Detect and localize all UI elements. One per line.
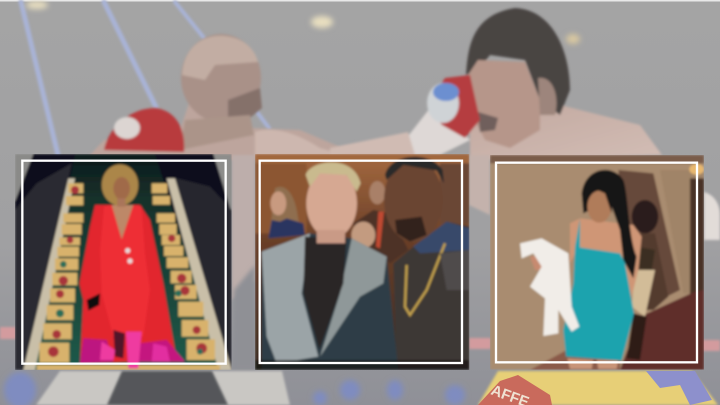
ceiling lights bbox=[26, 1, 580, 44]
dark shorts at bottom bbox=[107, 371, 228, 405]
man in background bbox=[353, 210, 408, 263]
white frame bbox=[496, 163, 697, 362]
white robe at bottom bbox=[36, 371, 290, 405]
panel: woman in red on the staircase bbox=[15, 154, 232, 370]
white frame bbox=[260, 161, 462, 363]
main woman's arms and chest bbox=[569, 218, 644, 298]
left boxer bbox=[90, 34, 415, 300]
left boxer shadow column bbox=[232, 265, 255, 370]
left man's suit bbox=[262, 233, 398, 370]
right man's shirt bbox=[393, 222, 469, 370]
woman: red cape and jumpsuit bbox=[79, 205, 177, 363]
dress bbox=[563, 247, 634, 361]
panel: woman in turquoise dress bbox=[490, 155, 704, 370]
left man's head bbox=[306, 168, 357, 238]
shorts blue emblem bbox=[646, 371, 712, 405]
right boxer glove edge bbox=[704, 192, 720, 240]
ring ropes bbox=[0, 327, 720, 351]
legs bbox=[567, 358, 593, 369]
crowd lights at the bottom bbox=[4, 372, 465, 405]
second woman behind bbox=[632, 200, 658, 233]
panel: two men selfie bbox=[255, 154, 469, 370]
right man's head bbox=[384, 158, 443, 242]
white jacket bbox=[520, 238, 579, 336]
stage light beams bbox=[21, 2, 269, 155]
hair and face bbox=[582, 170, 637, 278]
yellow shorts at bottom bbox=[478, 371, 718, 405]
woman in background bbox=[270, 186, 300, 222]
white frame bbox=[22, 161, 226, 364]
shorts logo badge bbox=[478, 375, 552, 405]
right boxer bbox=[330, 8, 662, 215]
